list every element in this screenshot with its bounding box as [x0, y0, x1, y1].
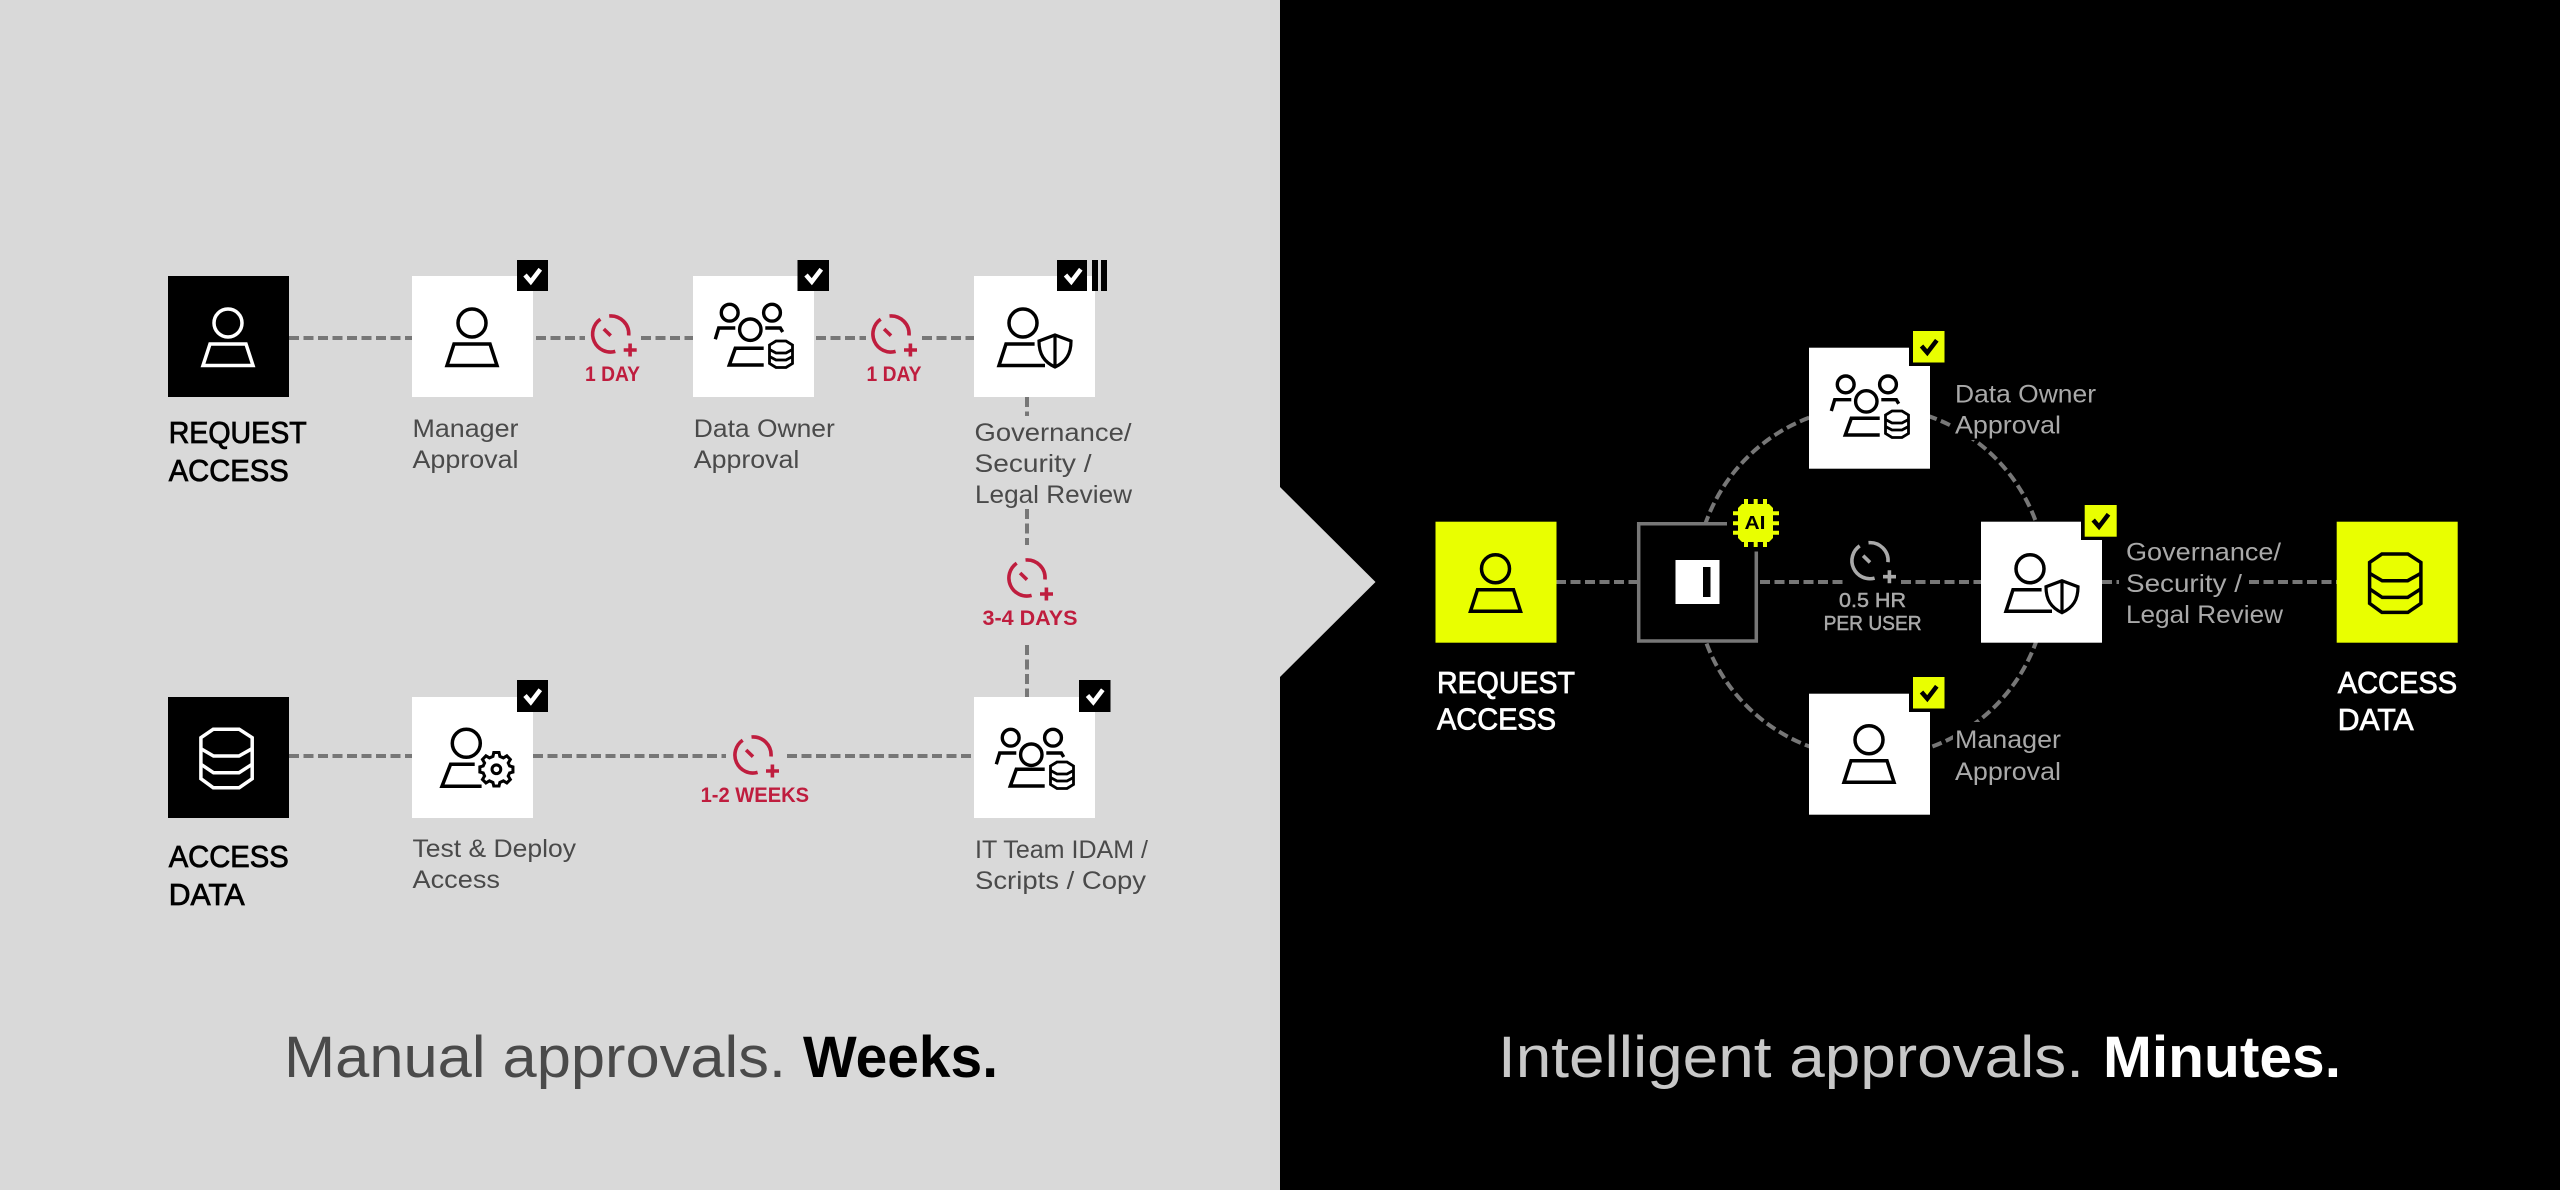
node: data owner approval: Approval [694, 446, 799, 474]
node: manager approval: Manager [412, 415, 518, 443]
time delay: 1 day [585, 316, 640, 386]
heading: manual approvals: Manual approvals. [284, 1025, 786, 1090]
time estimate: 0.5 hr per user: 0.5 HR [1839, 589, 1906, 612]
node: manager approval: Approval [1955, 758, 2061, 786]
time estimate: 0.5 hr per user: PER USER [1824, 612, 1922, 635]
node: manager approval: Manager [1955, 726, 2061, 754]
node: IT team IDAM scripts copy: Scripts / Copy [975, 867, 1147, 895]
node: governance security legal review: Legal Review [2126, 601, 2284, 629]
node: governance security legal review: Security / [974, 450, 1092, 478]
node: request access [1436, 522, 1575, 736]
heading: manual approvals: Weeks. [803, 1025, 998, 1090]
node: governance security legal review: Governance/ [974, 419, 1132, 447]
node: access data: DATA [169, 877, 245, 912]
node: request access: ACCESS [169, 453, 289, 488]
node: manager approval: Approval [412, 446, 518, 474]
node: request access: ACCESS [1437, 702, 1556, 736]
node: test and deploy access [412, 680, 577, 894]
heading: intelligent approvals: Intelligent approvals. [1498, 1025, 2084, 1090]
node: data owner approval: Approval [1955, 412, 2061, 440]
node: test and deploy access: Access [412, 866, 500, 894]
connector lines: manual workflow [289, 338, 1027, 756]
node: data owner approval: Data Owner [1955, 381, 2096, 409]
time delay: 1-2 weeks: 1-2 WEEKS [701, 784, 809, 807]
node: access data [2337, 522, 2458, 737]
time delay: 3-4 days: 3-4 DAYS [982, 607, 1078, 630]
node: request access [168, 276, 307, 488]
heading: intelligent approvals [1498, 1025, 2341, 1090]
panel: intelligent workflow [1436, 328, 2458, 815]
icon: AI chip: AI [1744, 513, 1766, 533]
node: governance security legal review [1981, 502, 2284, 643]
time delay: 1-2 weeks [701, 737, 809, 807]
node: governance security legal review: Legal Review [975, 481, 1133, 509]
node: request access: REQUEST [1437, 665, 1575, 700]
time delay: 1 day [866, 316, 922, 386]
heading: intelligent approvals: Minutes. [2103, 1025, 2341, 1090]
node: access data: ACCESS [2338, 665, 2457, 700]
node: access data: ACCESS [169, 839, 289, 874]
node: access data [168, 697, 289, 912]
node: request access: REQUEST [169, 415, 307, 450]
time delay: 1 day: 1 DAY [585, 363, 640, 386]
node: governance security legal review: Governance/ [2126, 539, 2281, 567]
time delay: 3-4 days [982, 560, 1078, 630]
node: manager approval [412, 260, 548, 474]
node: IT team IDAM scripts copy [974, 680, 1148, 895]
node: test and deploy access: Test & Deploy [412, 835, 577, 863]
time delay: 1 day: 1 DAY [866, 363, 922, 386]
node: access data: DATA [2338, 702, 2414, 737]
node: data owner approval: Data Owner [694, 415, 835, 443]
node: data owner approval [693, 260, 835, 474]
heading: manual approvals [284, 1025, 998, 1090]
panel: manual workflow [168, 260, 1148, 912]
node: AI approval engine [1639, 499, 1779, 641]
node: data owner approval [1809, 328, 2096, 469]
node: IT team IDAM scripts copy: IT Team IDAM / [975, 836, 1148, 864]
node: manager approval [1809, 674, 2061, 815]
node: governance security legal review: Security / [2126, 570, 2242, 598]
icon: AI chip [1733, 499, 1779, 547]
connector lines: intelligent workflow [1556, 406, 2337, 758]
time estimate: 0.5 hr per user [1824, 543, 1922, 635]
node: governance security legal review [974, 260, 1133, 509]
